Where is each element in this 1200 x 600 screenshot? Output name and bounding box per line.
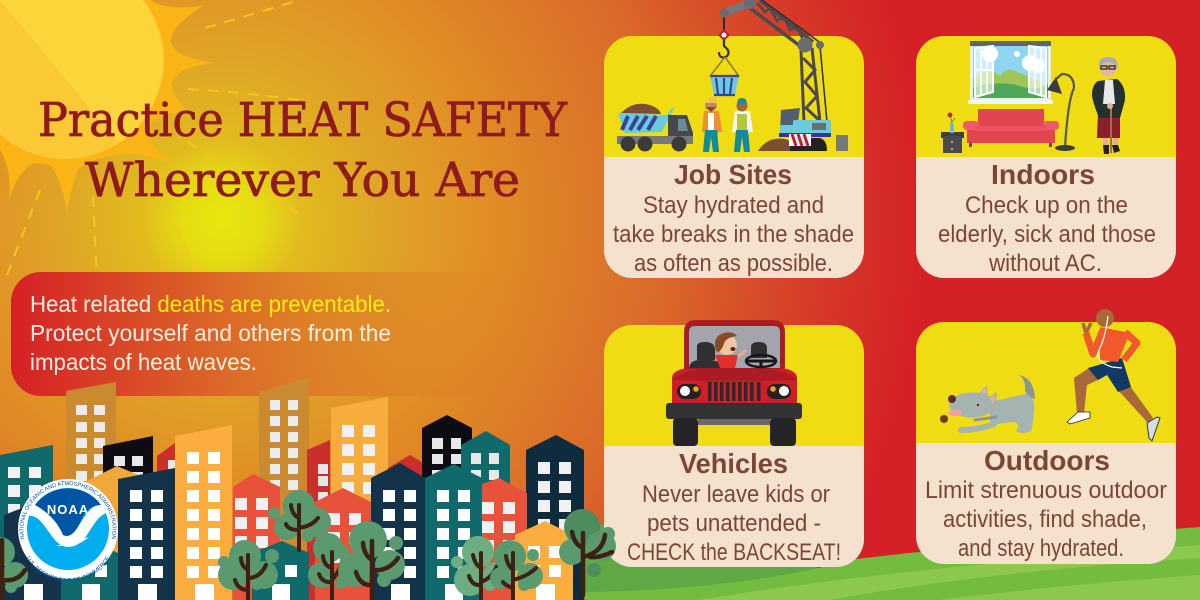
icon: workers [702, 97, 753, 152]
callout: heat deaths preventable: Heat related deaths are preventable. [30, 291, 391, 317]
building: navy left [118, 468, 175, 600]
tree: right 2 [490, 540, 543, 600]
title: Wherever You Are [85, 153, 520, 207]
tree: far right [559, 509, 616, 595]
tree: centre 2 [338, 521, 405, 600]
building: navy centre [371, 463, 425, 600]
building: teal behind logo [61, 540, 118, 600]
building: tan left [66, 382, 116, 600]
panel: outdoors [916, 309, 1176, 564]
panel: vehicles: CHECK the BACKSEAT! [627, 539, 841, 566]
building: teal far left [0, 445, 53, 600]
building: orange house right [515, 521, 573, 600]
icon: dog [940, 375, 1035, 433]
icon: elderly woman [1092, 57, 1125, 154]
panel: outdoors: activities, find shade, [943, 506, 1147, 533]
icon: floor lamp [1047, 74, 1075, 151]
panel: indoors: Indoors [991, 159, 1095, 190]
panel: indoors: elderly, sick and those [938, 221, 1156, 248]
callout: heat deaths preventable: impacts of heat waves. [30, 349, 257, 375]
tree: far left [0, 537, 28, 600]
tree: left 1 [218, 540, 279, 600]
title [38, 93, 568, 207]
tree: centre 1 [308, 533, 349, 600]
logo: NOAA: U.S. DEPARTMENT OF COMMERCE [26, 556, 110, 582]
icon: dump truck [617, 104, 693, 152]
title: Practice HEAT SAFETY [38, 93, 568, 147]
building: red back centre [307, 440, 330, 600]
callout: heat deaths preventable [11, 272, 560, 396]
green hills [585, 524, 1200, 600]
building: small red roof [388, 455, 435, 520]
icon: red jeep with child [666, 320, 802, 446]
logo: NOAA [18, 479, 118, 582]
tree: right 1 [451, 536, 509, 600]
icon: runner [1067, 309, 1160, 441]
building: red house left [233, 474, 280, 600]
panel: job sites [604, 0, 864, 278]
building: tan right [259, 377, 309, 600]
building: orange tower left [175, 425, 232, 600]
icon: crane [710, 0, 848, 151]
panel: indoors: without AC. [988, 250, 1102, 277]
tree: left 2 [268, 490, 331, 550]
panel: vehicles: pets unattended - [647, 510, 821, 537]
building: navy behind logo [4, 505, 61, 600]
building: orange tower centre [331, 397, 388, 600]
panel: job sites: as often as possible. [634, 250, 833, 277]
sun [0, 0, 300, 280]
building: teal centre [425, 464, 482, 600]
building: red house right [482, 478, 527, 600]
building: teal back house [461, 431, 510, 510]
panel: vehicles: Vehicles [679, 448, 788, 479]
panel: vehicles [604, 320, 864, 567]
building: black house [422, 415, 472, 510]
panel: indoors [916, 36, 1176, 278]
icon: side table with vase [941, 113, 964, 153]
trees [0, 490, 616, 600]
panel: outdoors: and stay hydrated. [958, 535, 1124, 562]
building: orange roof behind logo [85, 466, 150, 600]
logo: NOAA: NATIONAL OCEANIC AND ATMOSPHERIC ADMINISTRATION [20, 481, 116, 540]
city skyline [0, 377, 584, 600]
panel: job sites: take breaks in the shade [613, 221, 854, 248]
logo: NOAA: NOAA [47, 502, 89, 517]
building: red house centre [315, 488, 371, 600]
building: black tower [103, 436, 153, 600]
panel: outdoors: Outdoors [984, 445, 1110, 476]
panel: job sites: Stay hydrated and [643, 192, 824, 219]
panel: job sites: Job Sites [674, 159, 792, 190]
building: red back left [157, 443, 175, 600]
callout: heat deaths preventable: Protect yourself and others from the [30, 320, 391, 346]
icon: sofa [963, 109, 1059, 147]
building: teal house [252, 541, 309, 600]
panel: indoors: Check up on the [965, 192, 1128, 219]
icon: window [968, 41, 1053, 104]
panel: vehicles: Never leave kids or [642, 481, 830, 508]
panel: outdoors: Limit strenuous outdoor [925, 477, 1167, 504]
building: navy right [526, 435, 584, 600]
